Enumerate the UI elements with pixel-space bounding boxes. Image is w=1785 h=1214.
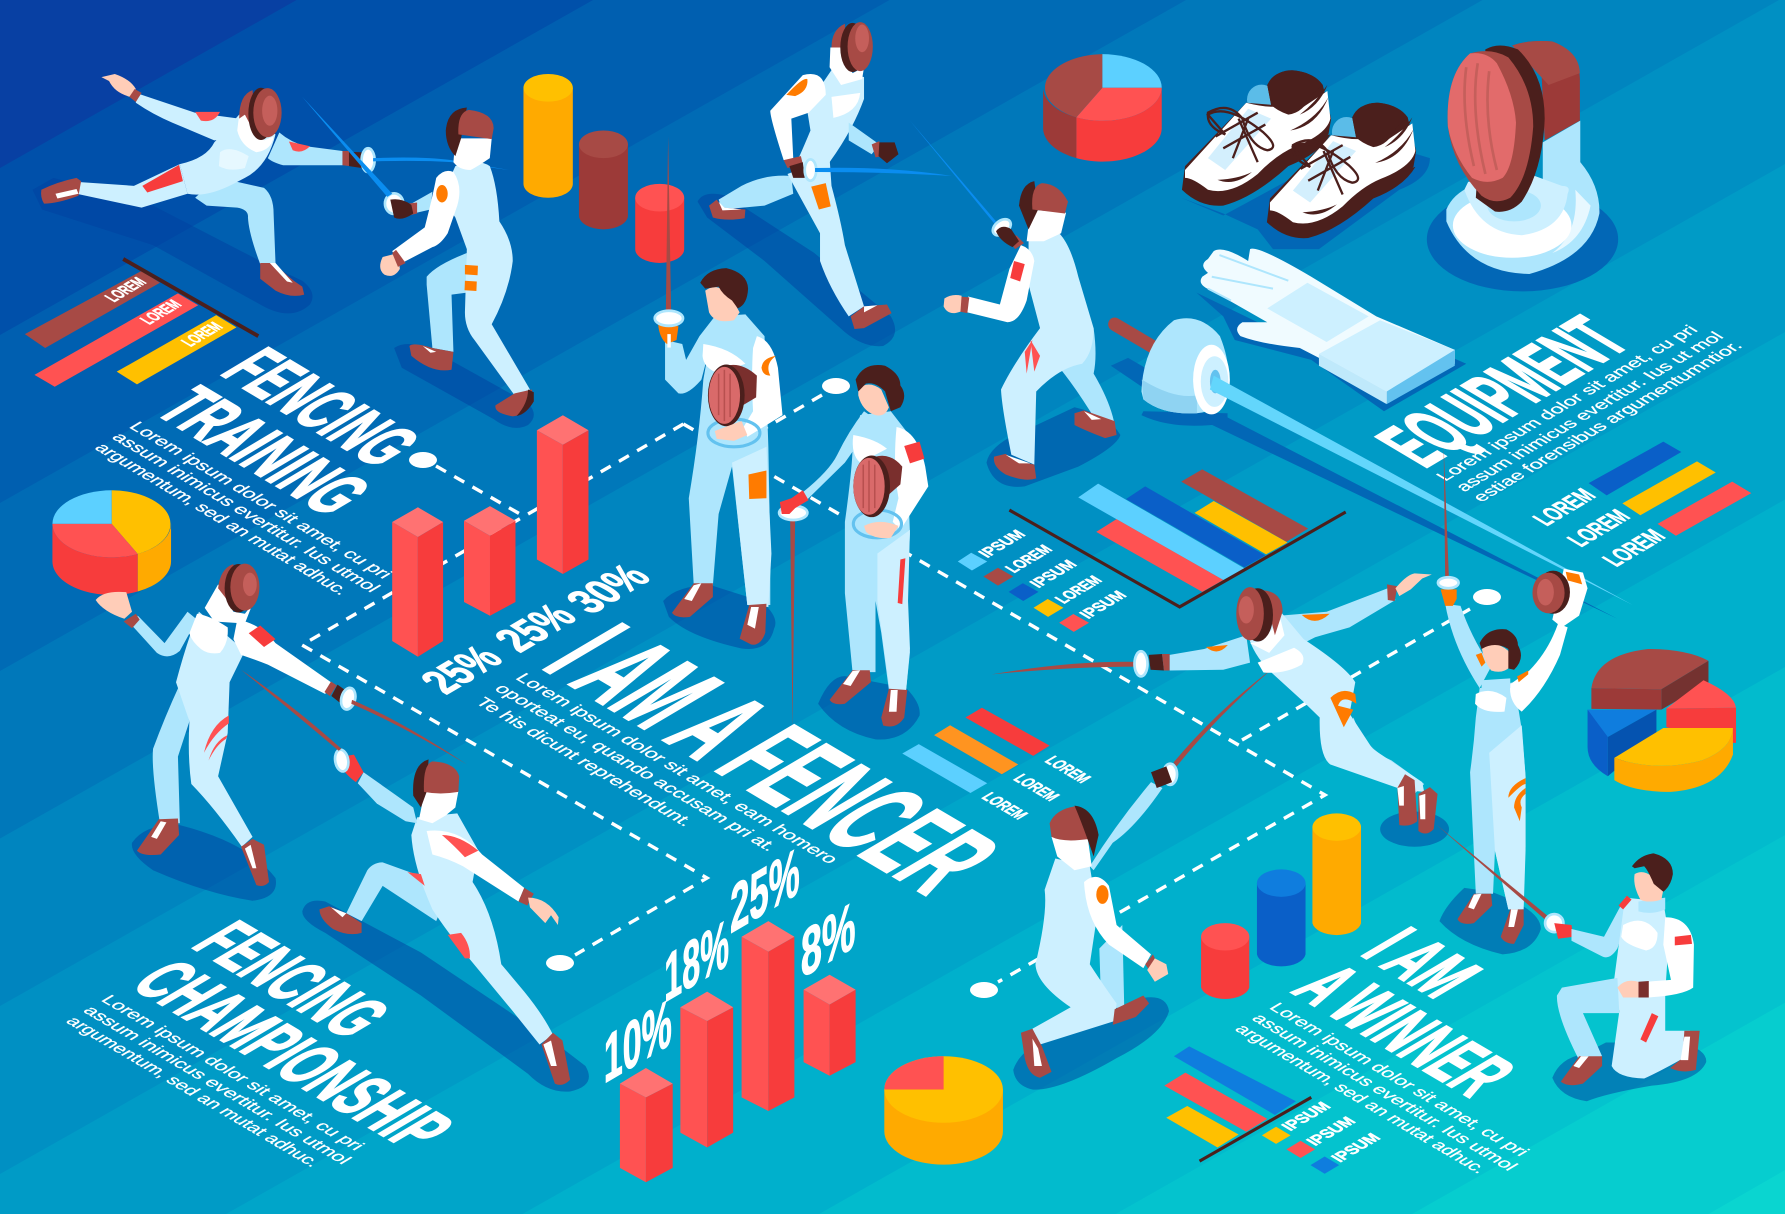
legend bars: fencer: LOREM <box>1040 753 1095 786</box>
legend bars: fencer <box>902 708 1095 822</box>
labels: percentages: 25% <box>730 832 800 948</box>
legend bars: equipment: LOREM <box>1596 525 1672 570</box>
fencer 2: en garde <box>380 108 534 428</box>
blade: fencer 1 foil <box>373 158 509 170</box>
labels: percentages: 10% <box>604 983 672 1098</box>
labels: bar percentages <box>409 557 661 700</box>
text block: training <box>90 419 397 598</box>
cylinder: yellow <box>1312 813 1361 935</box>
text block: winner <box>1231 1000 1534 1176</box>
legend bars: training: LOREM <box>135 297 186 327</box>
pie chart: exploded <box>1588 649 1736 792</box>
legend bars: fencer: LOREM <box>977 790 1032 822</box>
legend: ipsum lorem swatches: IPSUM <box>974 527 1030 560</box>
text block: training: argumentum, sed an mutat adhuc. <box>90 440 354 598</box>
bar chart: winner bars and legend <box>1164 1046 1385 1174</box>
icon: fencing mask on stand <box>1427 41 1618 291</box>
fencer 7: standing man with mask <box>655 136 783 649</box>
blade: fencer 2 foil <box>302 97 392 197</box>
blade: fencer 6 foil <box>910 121 996 223</box>
heading: fencing training: TRAINING <box>138 376 390 525</box>
panel: i am a winner <box>992 447 1736 1176</box>
fencer 6: en garde <box>944 181 1120 487</box>
legend: ipsum lorem swatches: LOREM <box>1051 573 1106 606</box>
fencer 4: crouching lunge <box>241 670 589 1092</box>
fencer 1: lunging <box>33 74 375 313</box>
fencer 10: kneeling with raised blade <box>1013 764 1177 1090</box>
blade: fencer 10 foil <box>1174 667 1275 766</box>
legend bars: equipment: LOREM <box>1560 505 1637 551</box>
text block: winner: Lorem ipsum dolor sit amet, cu pri <box>1265 1000 1534 1159</box>
bar chart: percent bars <box>620 921 856 1182</box>
bar chart: winner bars and legend: IPSUM <box>1302 1114 1360 1148</box>
legend bars: training: LOREM <box>100 275 151 305</box>
cylinder: blue <box>1257 869 1306 966</box>
cylinder: red <box>1201 923 1249 999</box>
connector: dashed flow lines with end dots <box>302 378 1501 998</box>
text block: winner: assum inimicus evertitur. Ius utmol <box>1247 1011 1522 1173</box>
legend bars: fencer: LOREM <box>1009 771 1064 804</box>
text block: winner: argumentum, sed an mutat adhuc. <box>1231 1021 1492 1176</box>
legend bars: training <box>25 259 258 387</box>
icon: shoes <box>1181 70 1430 249</box>
fencer 8: standing woman with mask <box>779 365 928 740</box>
epee: handle and bell guard <box>1111 318 1230 426</box>
heading: i am a winner: A WINNER <box>1274 953 1535 1107</box>
text block: championship: assum inimicus evertitur. Ius utmol <box>79 1003 356 1167</box>
bar chart: winner bars and legend: IPSUM <box>1327 1131 1385 1165</box>
text block: fencer: Lorem ipsum dolor sit amet, eam homero <box>511 670 843 866</box>
heading: fencing training: FENCING <box>204 337 439 477</box>
text block: equipment: estiae forensibus argumentumntior. <box>1468 338 1747 505</box>
panel: equipment <box>1009 41 1751 619</box>
panel: fencing training <box>25 74 588 657</box>
cylinder: brown <box>579 130 628 229</box>
panel: championship <box>62 557 661 1170</box>
labels: percentages: 8% <box>801 886 856 993</box>
text block: championship: argumentum, sed an mutat adhuc. <box>62 1014 326 1170</box>
heading: i am a winner <box>1274 916 1535 1107</box>
text block: fencer: Te his dicunt reprehendunt. <box>471 694 699 829</box>
legend: ipsum lorem swatches <box>958 527 1131 632</box>
cylinder: red <box>635 184 684 263</box>
bar chart: winner bars and legend: IPSUM <box>1277 1099 1335 1133</box>
heading: fencing championship: FENCING <box>176 910 408 1048</box>
labels: bar percentages: 25% <box>483 597 587 658</box>
legend: ipsum lorem swatches: IPSUM <box>1026 557 1081 590</box>
bar chart: training bars <box>392 415 588 657</box>
pie holder fencer 3 <box>96 564 467 901</box>
cylinder: yellow <box>523 74 573 198</box>
fencer 9: lunging forward <box>992 573 1449 847</box>
pie chart: brown blue red <box>1043 54 1162 162</box>
heading: fencing training <box>138 337 439 525</box>
legend bars: equipment <box>1526 442 1751 570</box>
fencer 11: woman celebrating <box>1438 447 1588 954</box>
text block: fencer: oporteat eu, quando accusam pri at. <box>490 681 782 854</box>
bar chart: equipment horizontal bars <box>1009 469 1346 607</box>
epee: blade <box>1204 376 1633 619</box>
heading: fencing championship <box>114 910 472 1161</box>
heading: i am a fencer: I AM A FENCER <box>515 607 1030 911</box>
labels: bar percentages: 25% <box>409 638 513 700</box>
legend: ipsum lorem swatches: IPSUM <box>1075 588 1131 621</box>
pie chart: yellow red <box>884 1056 1003 1165</box>
labels: bar percentages: 30% <box>554 557 661 620</box>
text block: championship <box>62 992 369 1170</box>
legend bars: training: LOREM <box>177 319 227 349</box>
fencer 12: kneeling man <box>1436 824 1706 1101</box>
legend: ipsum lorem swatches: LOREM <box>1001 542 1057 575</box>
labels: percentages: 18% <box>664 904 729 1017</box>
text block: championship: Lorem ipsum dolor sit amet, cu pri <box>97 992 369 1153</box>
heading: i am a winner: I AM <box>1344 916 1501 1009</box>
panel: i am a fencer <box>471 607 1177 1182</box>
text block: equipment: Lorem ipsum dolor sit amet, cu pri <box>1431 322 1702 484</box>
text block: equipment: assum inimicus evertitur. Ius ut mol <box>1451 329 1728 494</box>
labels: percentages <box>604 832 856 1098</box>
pie chart: blue yellow red <box>52 490 171 595</box>
icon: fencing glove <box>1196 249 1466 411</box>
legend bars: equipment: LOREM <box>1526 484 1602 530</box>
panel: centre fencers <box>579 22 1230 740</box>
text block: training: assum inimicus evertitur. Ius utmol <box>108 430 385 595</box>
fencer 5: running <box>698 22 952 346</box>
text block: equipment <box>1431 322 1747 505</box>
text block: training: Lorem ipsum dolor sit amet, cu pri <box>125 419 397 581</box>
